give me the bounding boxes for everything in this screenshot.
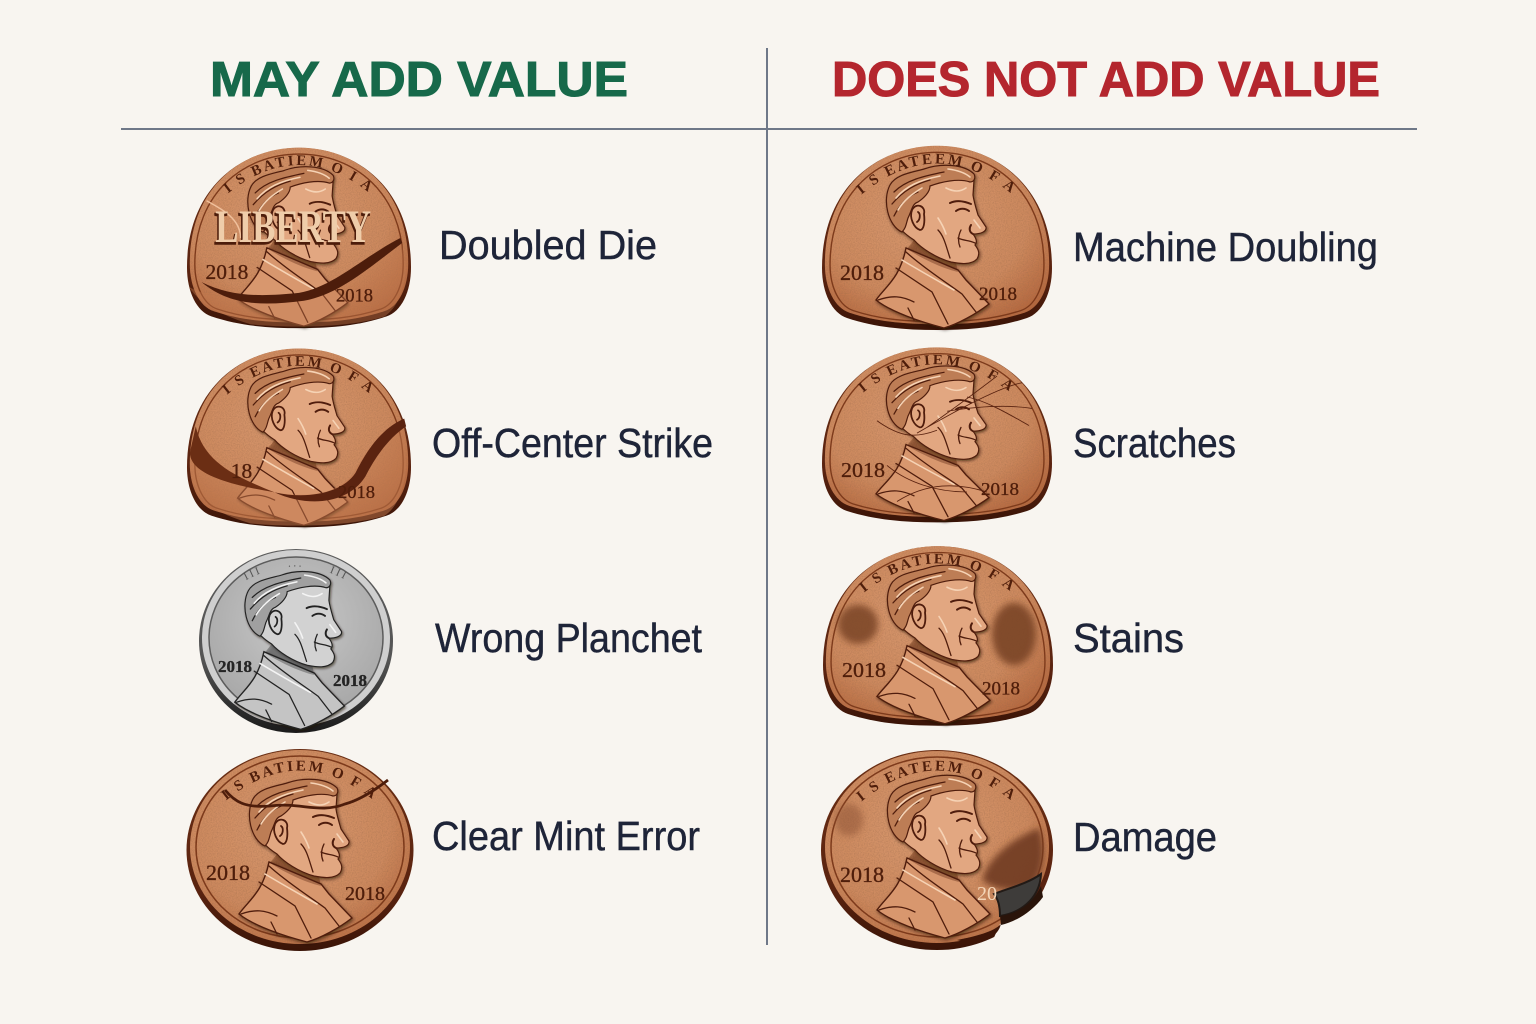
coin: doubled die — [187, 148, 411, 330]
label: damage: Damage — [1073, 814, 1217, 860]
coin: stains: 2018 — [982, 679, 1020, 699]
label: wrong planchet: Wrong Planchet — [435, 615, 703, 661]
label: stains: Stains — [1073, 615, 1184, 661]
coin: machine doubling: I S EATEEM O F A — [856, 154, 1014, 194]
horizontal divider — [121, 128, 1417, 130]
vertical divider — [766, 48, 768, 945]
coin: machine doubling: 2018 — [979, 284, 1017, 305]
coin: off-center strike: 2018 — [338, 482, 375, 502]
coin: machine doubling — [822, 146, 1052, 332]
coin: stains: 2018 — [842, 658, 886, 682]
label: clear mint error: Clear Mint Error — [432, 813, 700, 859]
coin: machine doubling: 2018 — [840, 260, 884, 285]
label: off-center strike: Off-Center Strike — [432, 420, 713, 466]
coin: wrong planchet — [199, 549, 393, 733]
coin: wrong planchet: III ... III — [244, 565, 346, 580]
heading: does not add value: DOES NOT ADD VALUE — [832, 53, 1380, 107]
coin: doubled die: LIBERTY — [214, 203, 370, 254]
coin: scratches: 2018 — [981, 479, 1019, 500]
coin: doubled die: LIBERTY — [215, 201, 371, 252]
coin: off-center strike: 18 — [231, 459, 252, 483]
coin: doubled die: 2018 — [205, 260, 248, 284]
coin: clear mint error — [186, 749, 414, 951]
coin: wrong planchet: 2018 — [218, 657, 252, 676]
coin: scratches: 2018 — [841, 458, 885, 482]
coin: doubled die: 2018 — [336, 286, 373, 307]
coin: clear mint error: 2018 — [206, 860, 250, 885]
coin: damage: 20 — [977, 883, 997, 905]
label: machine doubling: Machine Doubling — [1073, 224, 1378, 270]
coin: off-center strike: I S EATIEM O F A — [222, 356, 372, 394]
coin: damage: I S EATEEM O F A — [856, 760, 1014, 802]
coin: stains — [823, 546, 1053, 728]
coin: clear mint error: 2018 — [345, 883, 385, 905]
coin: damage — [821, 750, 1053, 950]
label: scratches: Scratches — [1073, 420, 1236, 466]
coin: stains: I S BATIEM O F A — [858, 554, 1012, 592]
coin: scratches: I S EATIEM O F A — [858, 354, 1012, 392]
heading: may add value: MAY ADD VALUE — [210, 53, 628, 107]
coin: off-center strike — [187, 348, 411, 529]
coin: scratches — [822, 347, 1052, 524]
coin: clear mint error: I S BATIEM O F A — [220, 760, 374, 800]
coin: damage: 2018 — [840, 862, 884, 887]
label: doubled die: Doubled Die — [439, 222, 657, 268]
coin: wrong planchet: 2018 — [333, 671, 367, 690]
coin: doubled die: I S BATIEM O I A — [222, 155, 370, 193]
